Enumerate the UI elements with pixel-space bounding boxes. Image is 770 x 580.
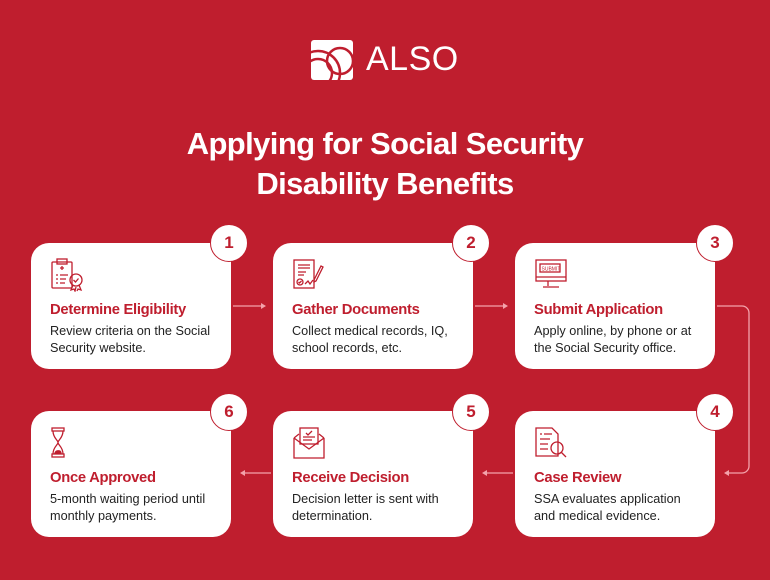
- title: Disability Benefits: [256, 166, 514, 201]
- panel: step 5: [273, 411, 473, 537]
- heading: Gather Documents: [292, 302, 420, 318]
- badge 2: 2: [466, 233, 476, 252]
- panel: step 4: [515, 411, 715, 537]
- badge 5: 5: [466, 402, 476, 421]
- badge 5: [452, 393, 490, 431]
- heading: Determine Eligibility: [50, 302, 186, 318]
- badge 6: [210, 393, 248, 431]
- text: 5-month waiting period until monthly payments.: [50, 492, 205, 522]
- badge 3: [696, 224, 734, 262]
- badge 1: 1: [224, 233, 234, 252]
- icon: hourglass: [51, 427, 65, 458]
- icon: document with magnifier: [535, 427, 566, 458]
- badge 3: 3: [710, 233, 720, 252]
- badge 4: 4: [710, 402, 720, 421]
- text: SSA evaluates application and medical evidence.: [534, 492, 681, 522]
- icon: clipboard with badge: [51, 258, 83, 292]
- logo: [311, 40, 459, 80]
- heading: Receive Decision: [292, 470, 409, 486]
- panel: step 6: [31, 411, 231, 537]
- badge 4: [696, 393, 734, 431]
- text: Review criteria on the Social Security website.: [50, 324, 210, 354]
- heading: Submit Application: [534, 302, 663, 318]
- title: [187, 126, 584, 201]
- heading: Case Review: [534, 470, 621, 486]
- badge 2: [452, 224, 490, 262]
- icon: logo mark: [311, 40, 353, 80]
- icon: document with pen: [293, 259, 324, 289]
- panel: step 1: [31, 243, 231, 369]
- text: Apply online, by phone or at the Social Security office.: [534, 324, 691, 354]
- text: Collect medical records, IQ, school records, etc.: [292, 324, 448, 354]
- panel: step 2: [273, 243, 473, 369]
- title: Applying for Social Security: [187, 126, 583, 161]
- heading: Once Approved: [50, 470, 156, 486]
- text: Decision letter is sent with determination.: [292, 492, 439, 522]
- panel: step 3: [515, 243, 715, 369]
- icon: monitor submit: SUBMIT: [542, 266, 560, 272]
- badge 6: 6: [224, 402, 234, 421]
- icon: envelope with letter: [293, 427, 325, 459]
- logo text: ALSO: [366, 40, 459, 78]
- icon: monitor submit: [535, 259, 567, 288]
- badge 1: [210, 224, 248, 262]
